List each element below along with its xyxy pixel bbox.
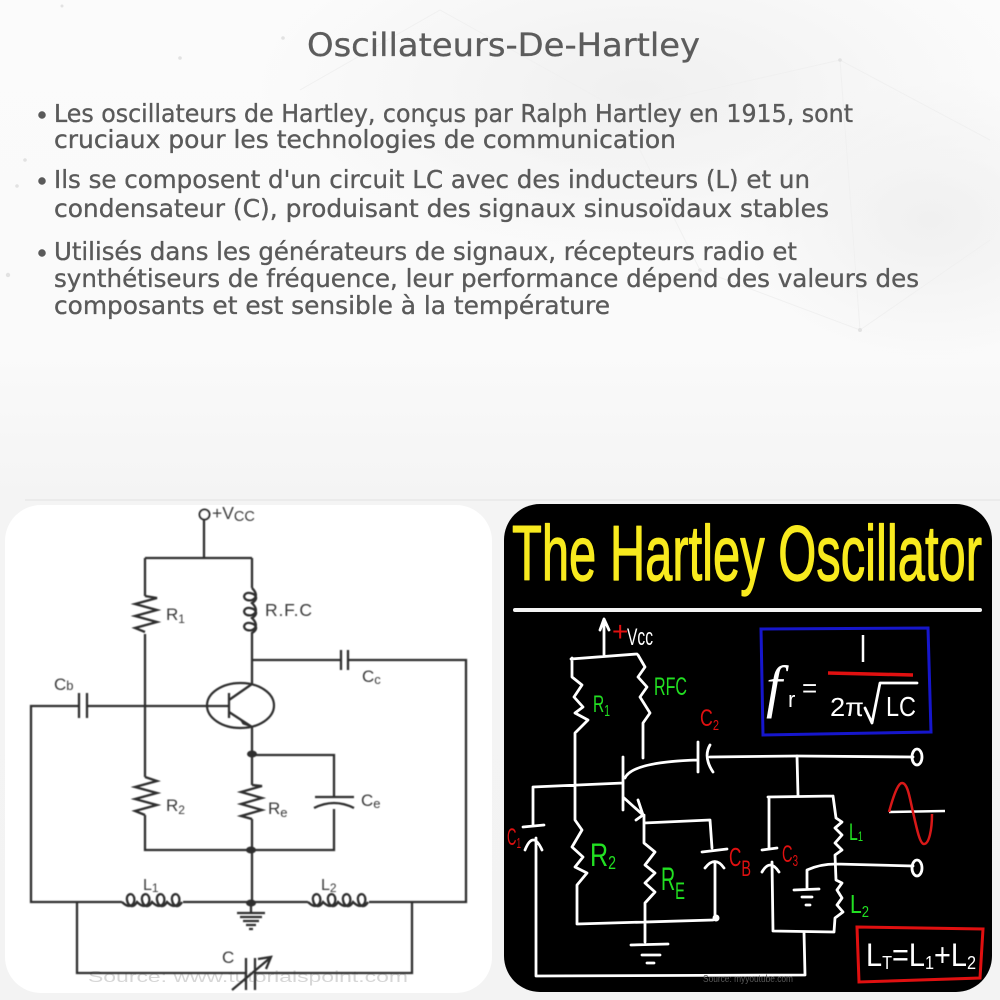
component labels: 1 [178, 612, 185, 626]
white and red Vcc label: + [612, 616, 628, 647]
sine wave icon [889, 783, 945, 844]
green component labels: R [661, 861, 684, 897]
component labels: R [166, 605, 178, 624]
capacitor Ce [314, 797, 354, 808]
bullet 3: synthétiseurs de fréquence, leur performance dépend des valeurs des [54, 264, 919, 293]
component labels: C [361, 791, 373, 810]
ground symbol [237, 903, 265, 929]
resistor Re [241, 785, 262, 819]
inductance box [857, 927, 983, 982]
source watermark: Source: myyoutube.com [703, 974, 793, 985]
formula box: = [802, 673, 817, 703]
red component labels: C [507, 824, 524, 851]
resistor R1 [135, 596, 157, 632]
tank circuit wires [762, 756, 913, 932]
schematic drawing [31, 503, 466, 990]
bullet 2: Ils se composent d'un circuit LC avec des inducteurs (L) et un [54, 165, 810, 194]
formula box: r [788, 687, 795, 712]
green component labels: L [850, 889, 864, 919]
green component labels: R [593, 691, 610, 718]
capacitor Cb [79, 693, 87, 718]
formula box: 2π [830, 692, 864, 722]
bullet 2 [38, 165, 829, 223]
junction dots [246, 750, 257, 906]
red component labels: B [741, 856, 751, 881]
green component labels: 2 [608, 853, 616, 873]
inductance box: L [866, 937, 884, 973]
transistor [207, 683, 274, 728]
red component labels: 1 [516, 835, 521, 852]
panel: The Hartley Oscillator blackboard [504, 504, 992, 992]
green component labels: 2 [862, 904, 869, 921]
component labels: 2 [178, 803, 185, 817]
red component labels: 3 [793, 853, 798, 870]
green component labels: 1 [858, 828, 863, 844]
white and red Vcc label: Vcc [627, 624, 653, 651]
board background [504, 504, 992, 992]
component labels: 2 [330, 881, 337, 895]
card background [5, 505, 492, 993]
component labels: 1 [152, 881, 159, 895]
formula box: f [766, 654, 789, 719]
formula box [761, 628, 931, 735]
red component labels: C [782, 841, 799, 868]
red component labels: C [729, 842, 748, 872]
green component labels: E [675, 878, 685, 905]
component labels: C [362, 667, 374, 686]
bullet 1: Les oscillateurs de Hartley, conçus par Ralph Hartley en 1915, sont [54, 99, 853, 128]
formula box: LC [886, 691, 916, 722]
inductance box: T [882, 953, 892, 973]
resistor R2 [135, 777, 157, 815]
bullet 1 [38, 99, 853, 154]
supply terminal [200, 510, 210, 520]
bullet 3: Utilisés dans les générateurs de signaux, récepteurs radio et [54, 237, 797, 266]
green component labels: L [849, 819, 862, 846]
component labels: e [373, 796, 381, 811]
bullet 1: cruciaux pour les technologies de communication [54, 125, 676, 154]
inductance box: =L [892, 937, 925, 973]
component labels: C [222, 948, 234, 967]
component labels: e [280, 805, 288, 820]
inductor RFC [244, 588, 256, 633]
white and red Vcc label [612, 616, 653, 651]
inductor L2 [308, 894, 368, 906]
title underline [513, 608, 982, 612]
component labels: R.F.C [265, 600, 312, 620]
red component labels [507, 705, 798, 881]
inductance box: +L [934, 937, 967, 973]
capacitor Cc [341, 650, 348, 670]
component labels: C [54, 675, 66, 694]
component labels: R [166, 796, 178, 815]
green component labels [590, 673, 869, 921]
green component labels: R [590, 837, 613, 873]
component labels: R [268, 799, 280, 818]
source watermark: Source: www.tutorialspoint.com [88, 969, 408, 986]
output terminals [912, 749, 922, 876]
component labels: b [66, 678, 74, 693]
inductance box: 1 [925, 953, 934, 973]
green component labels: RFC [654, 673, 687, 701]
component labels: CC [234, 509, 255, 525]
bullet list [38, 99, 919, 320]
amplifier circuit wires [523, 619, 913, 976]
component labels: L [143, 877, 152, 894]
red component labels: 2 [713, 717, 719, 734]
schematic wires [31, 519, 466, 973]
bullet 3 [38, 237, 919, 320]
inductor L1 [122, 894, 182, 906]
bullet 2: condensateur (C), produisant des signaux sinusoïdaux stables [54, 194, 829, 223]
component labels: +V [212, 503, 234, 523]
red component labels: C [700, 705, 717, 732]
green component labels: 1 [604, 703, 610, 720]
panel: circuit schematic [5, 503, 492, 993]
junction dot [712, 914, 720, 922]
inductance box: 2 [967, 953, 976, 973]
title: Oscillateurs-De-Hartley [307, 26, 700, 64]
variable capacitor C [232, 957, 271, 990]
bullet 3: composants et est sensible à la température [54, 291, 610, 320]
component labels: c [374, 672, 381, 687]
component labels [54, 503, 381, 967]
component labels: L [321, 877, 330, 894]
